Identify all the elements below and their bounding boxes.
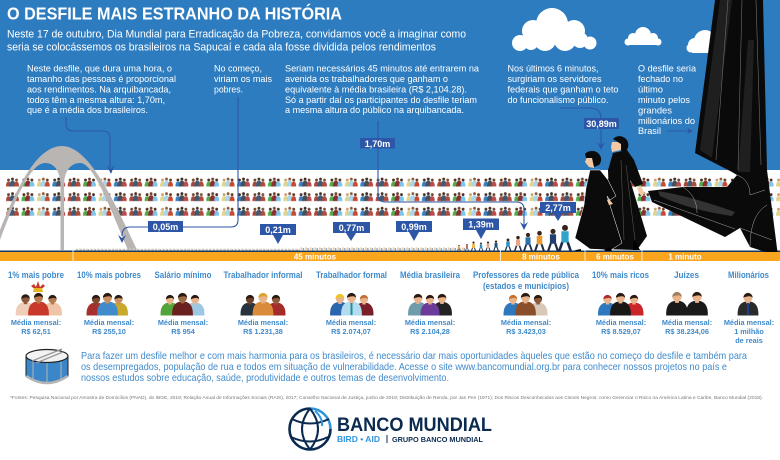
text: millionaires: milionários do [638, 116, 695, 127]
text: millionaires: O desfile seria [638, 64, 697, 74]
text: parade explanation: tamanho das pessoas é proporcional [27, 74, 176, 85]
text: the poorest first: No começo, [214, 64, 262, 74]
category: média brasileira: R$ 2.104,28 [410, 327, 450, 336]
label 2,77m [540, 202, 576, 221]
category: trabalhador formal: R$ 2.074,07 [331, 327, 371, 336]
category: milionários: Média mensal: [724, 318, 774, 327]
intro text: Neste 17 de outubro, Dia Mundial para Erradicação da Pobreza, convidamos você a imaginar como [7, 28, 466, 40]
category: salário mínimo [154, 270, 212, 336]
category: milionários: de reais [735, 336, 763, 345]
connector: average height and label 1,70m: 1,70m [365, 139, 390, 149]
text: parade explanation: todos têm a mesma altura: 1,70m, [27, 95, 165, 106]
category: 10% mais ricos: Média mensal: [596, 318, 646, 327]
label 1,39m: 1,39m [468, 220, 494, 230]
text: 45 minutes: avenida os trabalhadores que ganham o [285, 74, 448, 85]
text: millionaires: Brasil [638, 126, 661, 137]
text: millionaires: último [638, 84, 663, 96]
category: 1% mais pobre: R$ 62,51 [21, 327, 51, 336]
time label 6 minutes: 6 minutos [596, 252, 634, 261]
text: the poorest first: viriam os mais [214, 74, 272, 85]
category: 1% mais pobre [8, 270, 64, 336]
category: 10% mais pobres [77, 270, 141, 336]
category: professores: (estados e municípios) [483, 281, 569, 291]
sambadrome arch [0, 146, 137, 250]
category: 1% mais pobre: 1% mais pobre [8, 270, 64, 280]
time label 1 minute: 1 minuto [668, 252, 702, 261]
intro text: seria se colocássemos os brasileiros na Sapucaí e cada ala fosse dividida pelos rendimentos [7, 42, 436, 54]
category: 10% mais pobres: 10% mais pobres [77, 270, 141, 280]
category: trabalhador informal: Trabalhador informal [224, 270, 302, 280]
category: juízes [662, 270, 712, 336]
tiny paraders [75, 246, 465, 251]
text: 45 minutes: Seriam necessários 45 minutos até entrarem na [285, 64, 480, 74]
footnote sources: *Fontes: Pesquisa Nacional por Amostra de Domicílios (PNAD), do IBGE, 2018; Relação Anual de Informações Sociais (RAIS), 2017; Conselho Nacional de Justiça, junho de 2018; Distribuição de Renda, por Jan Pen (1971); Dos Riscos Desconhecidos aos Cisnes Negros: como Gerenciar o Risco na América Latina e Caribe, Banco Mundial (2018). [10, 395, 763, 401]
category: média brasileira: Média mensal: [405, 318, 455, 327]
category: média brasileira [400, 270, 461, 336]
connector: average height and label 1,70m [360, 121, 528, 230]
label 0,21m [260, 224, 296, 244]
cloud large [512, 8, 596, 51]
category: salário mínimo: Média mensal: [158, 318, 208, 327]
logo globe [290, 408, 330, 450]
category: milionários [724, 270, 774, 345]
crowd in the stands [6, 176, 780, 218]
label 1,39m [463, 218, 499, 239]
category: professores: R$ 3.423,03 [506, 327, 546, 336]
male judge [603, 136, 647, 250]
text: parade explanation: aos rendimentos. Na arquibancada, [27, 84, 171, 96]
growing paraders [458, 225, 571, 251]
category: 10% mais ricos: 10% mais ricos [592, 270, 649, 280]
text: millionaires: fechado no [638, 74, 683, 85]
category: 10% mais ricos [592, 270, 649, 336]
logo separator [386, 435, 388, 443]
category: trabalhador formal: Trabalhador formal [316, 270, 387, 280]
millionaire giant leg and shoe [648, 0, 778, 256]
text: 45 minutes: Só a partir daí os participantes do desfile teriam [285, 95, 477, 106]
connector: stands to people in the stands [66, 117, 114, 174]
category: juízes: Juízes [674, 270, 699, 280]
label 0,77m: 0,77m [339, 223, 364, 233]
icon: drum [26, 349, 68, 384]
text: last 6 minutes: surgiriam os servidores [508, 74, 602, 85]
text: last 6 minutes: do funcionalismo público. [508, 95, 608, 106]
logo group name: GRUPO BANCO MUNDIAL [392, 435, 484, 444]
category: milionários: Milionários [728, 270, 769, 280]
title: O DESFILE MAIS ESTRANHO DA HISTÓRIA [7, 2, 342, 24]
text: 45 minutes: a mesma altura do público na arquibancada. [285, 105, 464, 116]
time label 8 minutes: 8 minutos [522, 252, 560, 261]
category: juízes: Média mensal: [662, 318, 712, 327]
category: trabalhador informal [224, 270, 302, 336]
connector: poorest and label 0,05m: 0,05m [153, 222, 178, 232]
text: 45 minutes: equivalente à média brasileira (R$ 2,104.28). [285, 84, 467, 96]
label 0,99m: 0,99m [401, 222, 427, 232]
text: the poorest first: pobres. [214, 84, 243, 96]
time bar [0, 250, 780, 261]
category: trabalhador formal: Média mensal: [326, 318, 376, 327]
call to action text: nossos estudos sobre educação, saúde, produtividade e outros temas de desenvolvimento. [81, 373, 449, 384]
text: 45 minutes [285, 64, 480, 116]
category: juízes: R$ 38.234,06 [665, 327, 709, 336]
label 0,77m [333, 222, 370, 241]
text: parade explanation: que é a média dos brasileiros. [27, 105, 148, 116]
category: salário mínimo: Salário mínimo [154, 270, 212, 280]
text: last 6 minutes: Nos últimos 6 minutos, [508, 64, 598, 74]
text: millionaires [638, 64, 697, 137]
label 0,05m [148, 221, 183, 232]
connector: judges and label 30,89m: 30,89m [586, 119, 617, 129]
label 2,77m: 2,77m [545, 203, 571, 213]
category: milionários: 1 milhão [734, 327, 764, 336]
connector: poorest and label 0,05m [118, 97, 238, 243]
category: professores: Professores da rede pública [473, 270, 580, 280]
logo subtext: BIRD • AID [337, 434, 380, 444]
label 0,21m: 0,21m [265, 225, 291, 235]
text: millionaires: grandes [638, 106, 672, 116]
sky background [0, 0, 780, 170]
category: 10% mais pobres: R$ 255,10 [92, 327, 126, 336]
text: the poorest first [214, 64, 272, 96]
cloud small [624, 27, 662, 46]
category: professores: Média mensal: [501, 318, 551, 327]
category: 1% mais pobre: Média mensal: [11, 318, 61, 327]
category: 10% mais pobres: Média mensal: [84, 318, 134, 327]
clouds [512, 8, 722, 53]
intro text [7, 28, 466, 54]
call to action text [81, 351, 747, 384]
World Bank logo [290, 408, 492, 450]
label 1,70m [360, 138, 395, 148]
arrow: to giant leg [667, 128, 693, 134]
text: millionaires: minuto pelos [638, 95, 690, 106]
category: 10% mais ricos: R$ 8.529,07 [601, 327, 641, 336]
cloud behind leg [686, 30, 722, 53]
category: professores [473, 270, 580, 336]
category: trabalhador informal: Média mensal: [238, 318, 288, 327]
text: last 6 minutes: federais que ganham o teto [508, 84, 618, 96]
logo name: BANCO MUNDIAL [337, 414, 492, 436]
category: salário mínimo: R$ 954 [171, 327, 196, 336]
text: parade explanation: Neste desfile, que dura uma hora, o [27, 64, 172, 74]
parade ground line [0, 250, 780, 252]
category: trabalhador formal [316, 270, 387, 336]
category: média brasileira: Média brasileira [400, 270, 461, 280]
label 30,89m [584, 118, 619, 129]
time label 45 minutes: 45 minutos [294, 252, 337, 261]
text: last 6 minutes [508, 64, 618, 106]
female judge [574, 151, 622, 251]
connector: judges and label 30,89m [560, 108, 619, 150]
text: parade explanation [27, 64, 176, 116]
category: trabalhador informal: R$ 1.231,38 [243, 327, 283, 336]
label 0,99m [396, 221, 432, 241]
